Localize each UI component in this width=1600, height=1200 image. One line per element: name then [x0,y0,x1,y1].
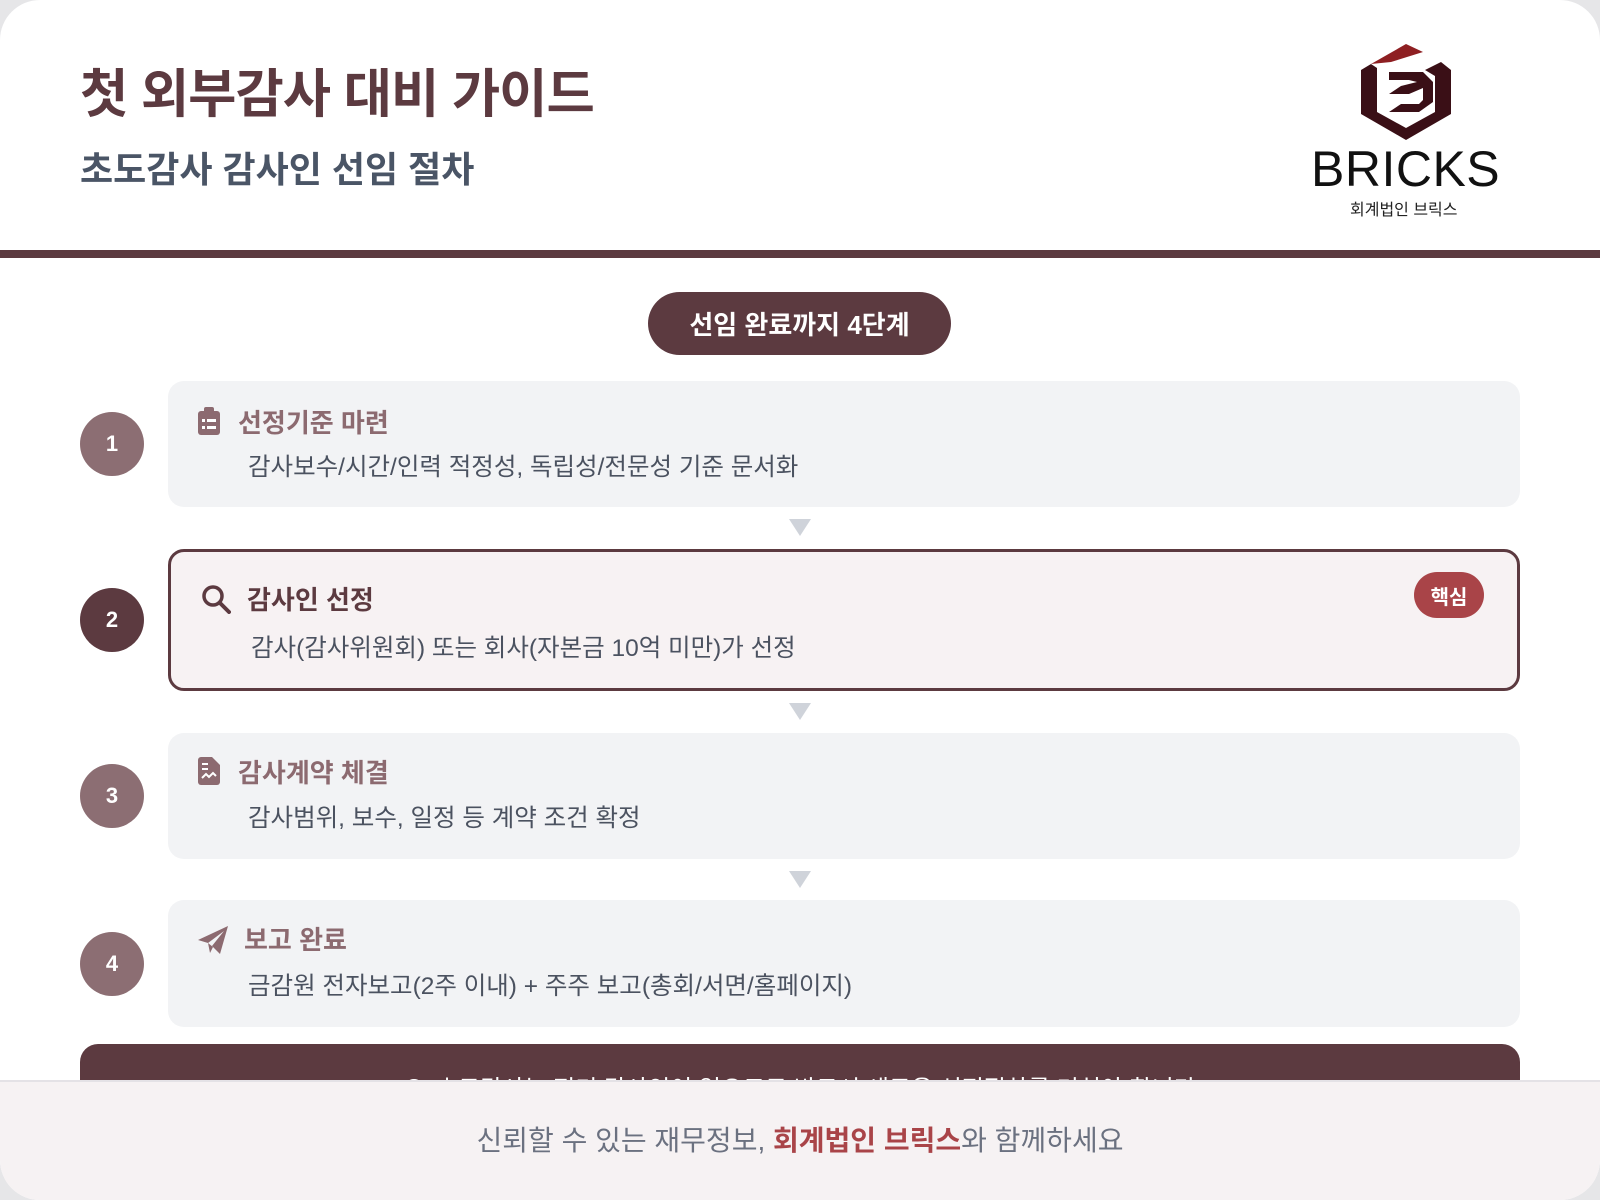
arrow [789,871,811,888]
badge [1414,572,1484,618]
step 4 card [168,900,1520,1027]
logo: 회계법인 브릭스 [1350,202,1458,219]
step 1 number [80,412,144,476]
step 2 number: 2 [106,607,118,632]
step 1 card [168,381,1520,507]
step 1 card: 감사보수/시간/인력 적정성, 독립성/전문성 기준 문서화 [248,454,798,481]
step 2 number [80,588,144,652]
step 4 number: 4 [106,951,118,976]
footer [0,1080,1600,1200]
step 4 number [80,932,144,996]
icon: paper plane [198,926,228,954]
step 3 card: 감사범위, 보수, 일정 등 계약 조건 확정 [248,805,641,832]
step 3 number: 3 [106,783,118,808]
header rule [0,250,1600,258]
step 2 card: 감사인 선정 [247,585,374,615]
subtitle: 초도감사 감사인 선임 절차 [80,149,474,190]
step 3 number [80,764,144,828]
logo: BRICKS [1311,141,1500,197]
step 2 card: 감사(감사위원회) 또는 회사(자본금 10억 미만)가 선정 [251,635,796,662]
callout banner [80,1044,1520,1134]
logo [1311,44,1500,219]
icon: clipboard [198,407,220,435]
step 1 card: 선정기준 마련 [238,408,389,438]
pill heading [648,292,951,355]
arrow [789,703,811,720]
title: 첫 외부감사 대비 가이드 [80,65,594,124]
step 2 card [168,549,1520,691]
step 4 card: 금감원 전자보고(2주 이내) + 주주 보고(총회/서면/홈페이지) [248,973,852,1000]
step 3 card [168,733,1520,859]
step 4 card: 보고 완료 [244,925,347,955]
badge: 핵심 [1431,586,1467,608]
pill heading: 선임 완료까지 4단계 [689,310,910,340]
arrow [789,519,811,536]
footer: 신뢰할 수 있는 재무정보, 회계법인 브릭스와 함께하세요 [477,1125,1123,1156]
step 3 card: 감사계약 체결 [238,758,389,788]
icon: contract [198,757,220,785]
step 1 number: 1 [106,431,118,456]
icon: search [202,585,231,614]
callout banner: 초도감사는 전기 감사인이 없으므로 반드시 새로운 선정절차를 거쳐야 합니다 [436,1076,1196,1103]
